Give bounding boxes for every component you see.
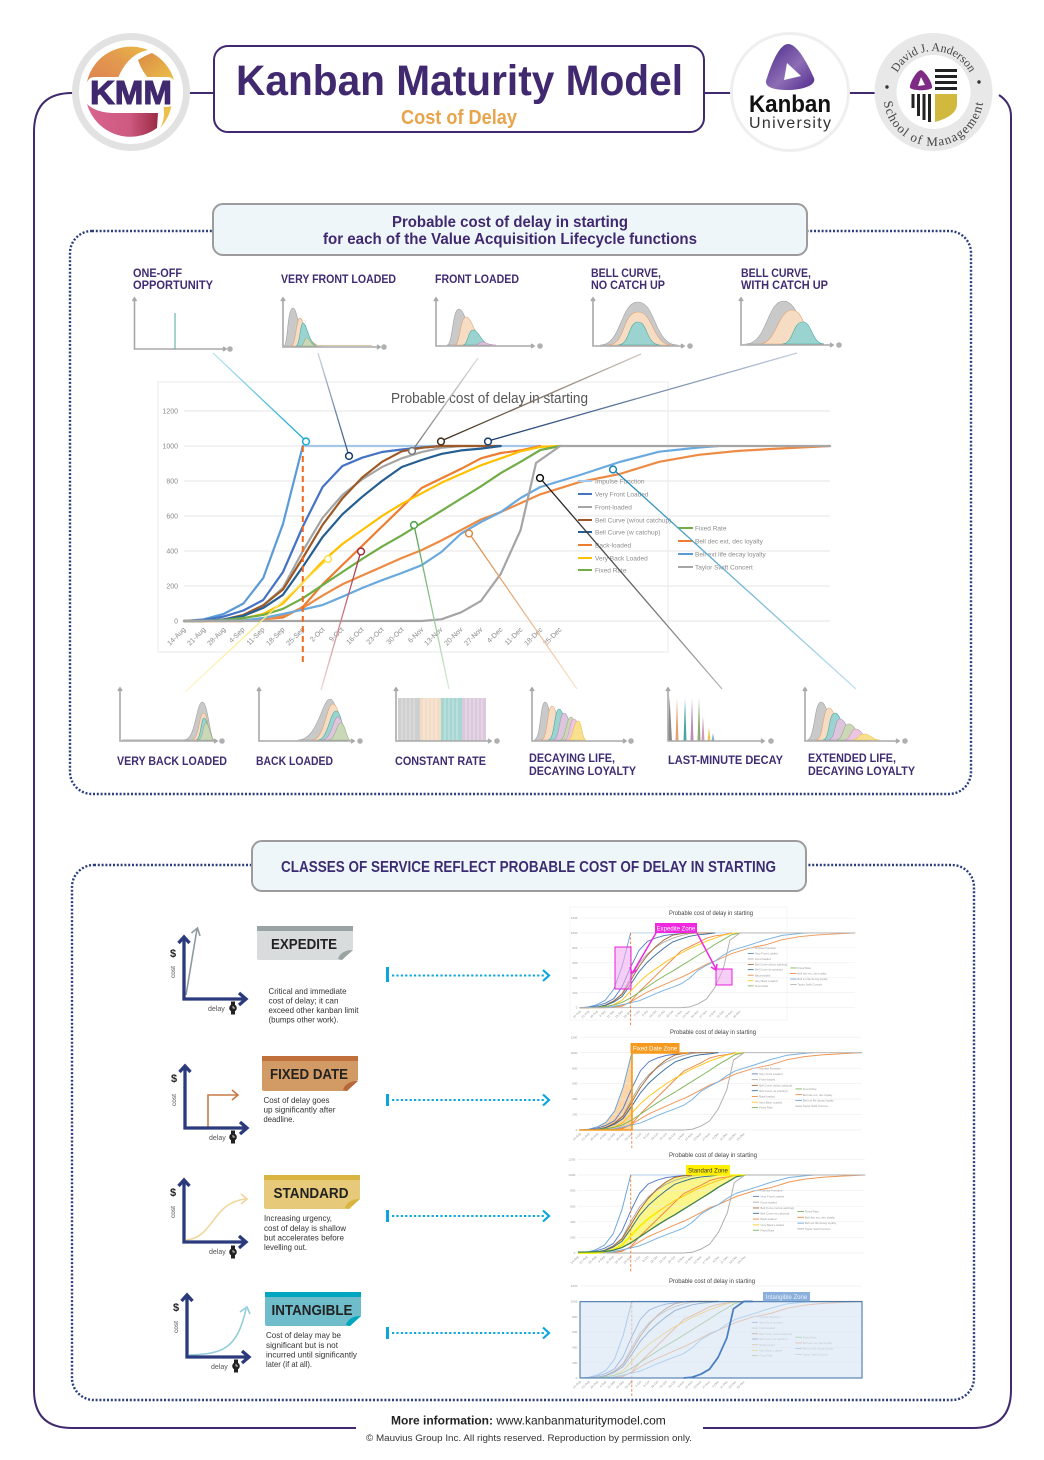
chart body: grid, axis labels, curves and legend: 20-Nov	[443, 626, 465, 647]
chart body: grid, axis labels, curves and legend: 0	[174, 618, 178, 626]
chart body: grid, axis labels, curves and legend: 4-Dec	[486, 626, 505, 645]
zone area	[580, 1302, 862, 1378]
description: intangible: significant but is not	[266, 1340, 339, 1350]
badge: fixed date	[262, 1056, 358, 1091]
chart body: grid, axis labels, curves and legend: 11-Dec	[504, 626, 525, 647]
chart body: grid, axis labels, curves and legend: 18-Sep	[265, 626, 286, 647]
zone box right	[716, 969, 732, 985]
badge: expedite	[257, 926, 353, 960]
icon: intangible cost graph: delay	[211, 1364, 228, 1371]
badge: standard	[264, 1175, 360, 1209]
mini chart: constant rate	[394, 688, 500, 744]
mini chart: one-off opportunity	[132, 298, 233, 352]
chart body: grid, axis labels, curves and legend: 6-Nov	[407, 626, 426, 645]
badge: intangible	[265, 1292, 361, 1326]
icon: intangible cost graph: cost	[173, 1321, 180, 1333]
description: standard: but accelerates before	[264, 1232, 344, 1242]
callout: bell curve no catch up	[438, 354, 641, 445]
main chart	[158, 382, 830, 663]
chart body: grid, axis labels, curves and legend: 14-Aug	[166, 626, 187, 647]
label: decaying life decaying loyalty	[529, 753, 636, 778]
chart body: grid, axis labels, curves and legend: Bell dec ext, dec loyalty	[695, 538, 764, 546]
callout: decaying life	[466, 530, 577, 689]
chart body: grid, axis labels, curves and legend: 800	[166, 478, 178, 486]
label: very front loaded: VERY FRONT LOADED	[281, 274, 396, 286]
zone pointers	[630, 933, 717, 973]
chart: expedite zone: Probable cost of delay in starting	[669, 910, 753, 917]
chart: intangible zone	[571, 1278, 862, 1396]
panel: value acquisition lifecycle functions	[70, 204, 971, 794]
zone box left	[615, 947, 631, 989]
heading: CLASSES OF SERVICE REFLECT PROBABLE COST OF DELAY IN STARTING	[281, 859, 776, 876]
description: expedite	[268, 986, 359, 1024]
heading box	[252, 841, 806, 891]
text: University: University	[749, 115, 831, 132]
description: intangible: Cost of delay may be	[266, 1330, 341, 1340]
icon: intangible cost graph	[173, 1295, 250, 1372]
zone label	[630, 1043, 680, 1053]
callout: bell curve with catch up	[485, 353, 797, 445]
zone curve	[684, 1301, 753, 1378]
icon: standard cost graph: $	[170, 1187, 176, 1199]
chart body: grid, axis labels, curves and legend: 27-Nov	[463, 626, 485, 647]
chart body: grid, axis labels, curves and legend: 600	[166, 514, 178, 520]
label: extended life decaying loyalty: EXTENDED LIFE,	[808, 753, 896, 765]
chart body: grid, axis labels, curves and legend: Bell Curve (w/out catchup)	[595, 518, 671, 524]
chart: fixed date zone	[571, 1029, 862, 1149]
label: bell curve with catch up: WITH CATCH UP	[741, 280, 828, 292]
mini chart: back loaded	[257, 688, 363, 744]
description: intangible: later (if at all).	[266, 1359, 312, 1369]
label: constant rate: CONSTANT RATE	[395, 756, 486, 768]
heading line 2: for each of the Value Acquisition Lifecycle functions	[323, 231, 697, 248]
icon: expedite cost graph: cost	[170, 966, 177, 978]
mini chart: front loaded	[434, 298, 543, 349]
chart body: grid, axis labels, curves and legend: 1000	[162, 444, 178, 450]
chart body: grid, axis labels, curves and legend: Taylor Swift Concert	[695, 564, 753, 572]
mini chart: very front loaded	[281, 298, 387, 350]
panel: classes of service	[72, 841, 974, 1400]
icon: standard cost graph: delay	[209, 1249, 226, 1256]
chart: fixed date zone: Probable cost of delay in starting	[670, 1029, 756, 1036]
description: fixed date: up significantly after	[264, 1104, 336, 1114]
label: bell curve no catch up: NO CATCH UP	[591, 280, 665, 292]
zone edges	[579, 1044, 688, 1130]
mini chart: bell curve with catch up	[739, 298, 842, 348]
chart body: grid, axis labels, curves and legend: 18-Dec	[523, 626, 545, 647]
description: intangible: incurred until significantly	[266, 1350, 358, 1360]
description: expedite: (bumps other work).	[268, 1014, 338, 1024]
chart body: grid, axis labels, curves and legend: Very Back Loaded	[595, 556, 648, 562]
callout: one-off to impulse curve	[213, 353, 309, 445]
zone label: Standard Zone	[688, 1168, 729, 1174]
chart body: grid, axis labels, curves and legend: 4-Sep	[228, 626, 246, 645]
description: standard: levelling out.	[264, 1242, 307, 1252]
chart body: grid, axis labels, curves and legend: 25-Sep	[285, 626, 306, 647]
description: fixed date	[264, 1095, 336, 1124]
chart body: grid, axis labels, curves and legend: 25-Dec	[542, 626, 564, 647]
mini chart: extended life decaying loyalty	[803, 688, 908, 744]
chart frame	[158, 382, 668, 652]
chart body: grid, axis labels, curves and legend: 11-Sep	[246, 626, 266, 647]
icon: fixed date cost graph: delay	[209, 1135, 226, 1142]
footer: more information: More information: www.kanbanmaturitymodel.com	[391, 1414, 666, 1428]
chart title: Probable cost of delay in starting	[391, 391, 588, 407]
icon: expedite cost graph: delay	[208, 1006, 225, 1013]
icon: fixed date cost graph: cost	[171, 1094, 178, 1106]
chart body: grid, axis labels, curves and legend: Very Front Loaded	[595, 492, 649, 498]
icon: expedite cost graph: $	[170, 948, 176, 960]
chart body: grid, axis labels, curves and legend: 9-Oct	[328, 626, 345, 644]
description: standard	[264, 1213, 347, 1252]
label: one-off opportunity	[133, 268, 213, 292]
label: bell curve with catch up: BELL CURVE,	[741, 268, 811, 280]
chart: intangible zone: Probable cost of delay in starting	[669, 1278, 755, 1285]
arrow: standard to chart	[388, 1210, 549, 1222]
label: decaying life decaying loyalty: DECAYING LOYALTY	[529, 766, 636, 778]
chart body: grid, axis labels, curves and legend: 30-Oct	[386, 626, 405, 646]
description: intangible	[266, 1330, 358, 1369]
chart body: grid, axis labels, curves and legend: 16-Oct	[346, 626, 365, 646]
description: expedite: Critical and immediate	[268, 986, 347, 996]
callout: back loaded	[321, 548, 364, 690]
label: decaying life decaying loyalty: DECAYING LIFE,	[529, 753, 615, 765]
chart body: grid, axis labels, curves and legend: 13-Nov	[423, 626, 445, 647]
heading line 1: Probable cost of delay in starting	[392, 214, 628, 231]
chart body: grid, axis labels, curves and legend: Bell Curve (w catchup)	[595, 530, 660, 536]
chart body: grid, axis labels, curves and legend: 1200	[162, 408, 178, 416]
chart: expedite zone	[570, 907, 855, 1026]
chart body: grid, axis labels, curves and legend: Back-loaded	[595, 542, 632, 550]
chart body: grid, axis labels, curves and legend: Bell ext life decay loyalty	[695, 552, 767, 558]
callout: very back loaded	[185, 556, 331, 692]
mini chart: last-minute decay	[666, 688, 774, 744]
badge: fixed date: FIXED DATE	[270, 1066, 348, 1083]
label: extended life decaying loyalty	[808, 753, 915, 778]
label: bell curve no catch up	[591, 268, 665, 292]
arrow: fixed date to chart	[388, 1094, 549, 1106]
zone label: Expedite Zone	[657, 926, 696, 932]
callout: last-minute decay	[537, 475, 722, 689]
title box	[214, 46, 704, 132]
arrow: intangible to chart	[388, 1327, 549, 1339]
chart body: grid, axis labels, curves and legend: 21-Aug	[186, 626, 207, 647]
label: back loaded: BACK LOADED	[256, 756, 333, 768]
label: very back loaded: VERY BACK LOADED	[117, 756, 227, 768]
chart body: grid, axis labels, curves and legend: Front-loaded	[595, 504, 632, 512]
mini chart: decaying life decaying loyalty	[530, 688, 634, 744]
chart: standard zone: Probable cost of delay in starting	[669, 1152, 757, 1159]
mini chart: bell curve no catch up	[591, 298, 693, 349]
chart: standard zone	[568, 1152, 865, 1272]
chart body: grid, axis labels, curves and legend: 23-Oct	[366, 626, 385, 646]
icon: intangible cost graph: $	[173, 1302, 179, 1314]
arrow: expedite to chart	[388, 967, 549, 982]
text: Kanban: Kanban	[749, 91, 831, 118]
zone label	[763, 1292, 810, 1302]
logo text: KMM: KMM	[90, 74, 172, 111]
chart body: grid, axis labels, curves and legend: Fixed Rate	[595, 568, 627, 574]
callout: constant rate	[411, 522, 449, 689]
mini chart: very back loaded	[118, 688, 225, 744]
zone label: Intangible Zone	[766, 1295, 808, 1301]
label: last-minute decay: LAST-MINUTE DECAY	[668, 755, 783, 767]
label: one-off opportunity: ONE-OFF	[133, 268, 182, 280]
subtitle: Cost of Delay	[401, 107, 518, 129]
callout: very front loaded	[318, 353, 352, 459]
label: one-off opportunity: OPPORTUNITY	[133, 280, 213, 292]
logo: Kanban University	[730, 32, 850, 152]
icon: standard cost graph: cost	[170, 1206, 177, 1218]
description: standard: Increasing urgency,	[264, 1213, 332, 1223]
chart body: grid, axis labels, curves and legend: 2-Oct	[309, 626, 326, 644]
chart body: grid, axis labels, curves and legend: Fixed Rate	[695, 526, 727, 532]
logo: David J. Anderson School of Management	[874, 33, 992, 151]
zone curves	[578, 1175, 745, 1253]
icon: fixed date cost graph: $	[171, 1073, 177, 1085]
zone label	[686, 1165, 730, 1175]
zone label	[655, 923, 697, 933]
icon: standard cost graph	[170, 1180, 247, 1258]
description: standard: cost of delay is shallow	[264, 1223, 347, 1233]
logo: David J. Anderson School of Management: David J. Anderson	[890, 43, 974, 73]
label: bell curve no catch up: BELL CURVE,	[591, 268, 661, 280]
chart body: grid, axis labels, curves and legend: 400	[166, 548, 178, 556]
footer: copyright: © Mauvius Group Inc. All rights reserved. Reproduction by permission only.	[366, 1433, 692, 1444]
callout: front loaded	[409, 358, 478, 454]
badge: intangible: INTANGIBLE	[272, 1302, 352, 1319]
description: fixed date: Cost of delay goes	[264, 1095, 330, 1105]
description: fixed date: deadline.	[264, 1114, 294, 1124]
label: extended life decaying loyalty: DECAYING LOYALTY	[808, 766, 915, 778]
title: Kanban Maturity Model	[236, 57, 683, 105]
chart body: grid, axis labels, curves and legend: Impulse Function	[595, 478, 645, 486]
icon: expedite cost graph	[170, 928, 246, 1014]
description: expedite: cost of delay; it can	[268, 996, 339, 1006]
chart body: grid, axis labels, curves and legend	[162, 408, 830, 663]
heading box	[213, 204, 807, 255]
badge: standard: STANDARD	[274, 1185, 349, 1202]
label: front loaded: FRONT LOADED	[435, 274, 519, 286]
label: bell curve with catch up	[741, 268, 828, 292]
logo: KMM	[72, 33, 190, 151]
badge: expedite: EXPEDITE	[271, 936, 337, 953]
logo: David J. Anderson School of Management: School of Management	[884, 101, 983, 146]
callout: extended life	[610, 466, 856, 689]
chart body: grid, axis labels, curves and legend: 28-Aug	[206, 626, 227, 647]
chart body: grid, axis labels, curves and legend: 200	[166, 584, 178, 590]
zone label: Fixed Date Zone	[633, 1046, 678, 1052]
description: expedite: exceed other kanban limit	[268, 1005, 359, 1015]
icon: fixed date cost graph	[171, 1066, 247, 1144]
